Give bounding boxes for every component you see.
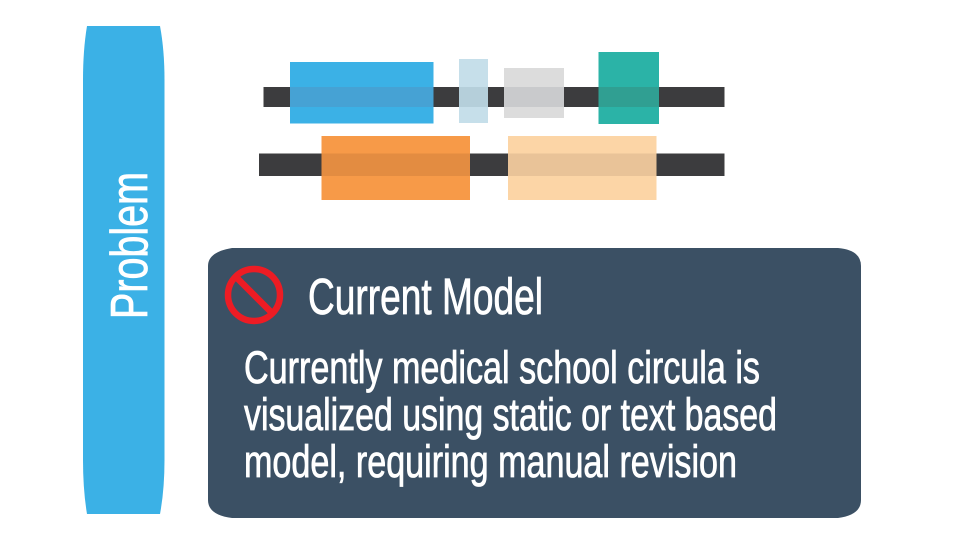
heading: Problem: Problem — [101, 172, 159, 319]
icon: prohibited sign — [228, 269, 280, 321]
text block: description — [244, 342, 777, 487]
panel: problem sidebar — [83, 26, 164, 514]
text block: description: visualized using static or text based — [244, 389, 777, 440]
text block: description: Currently medical school circula is — [244, 342, 760, 393]
chart: lower timeline track — [259, 136, 724, 200]
heading: Current Model: Current Model — [308, 268, 543, 325]
chart: upper timeline track — [264, 52, 724, 124]
panel: current model — [208, 248, 861, 518]
text block: description: model, requiring manual revision — [244, 436, 737, 487]
